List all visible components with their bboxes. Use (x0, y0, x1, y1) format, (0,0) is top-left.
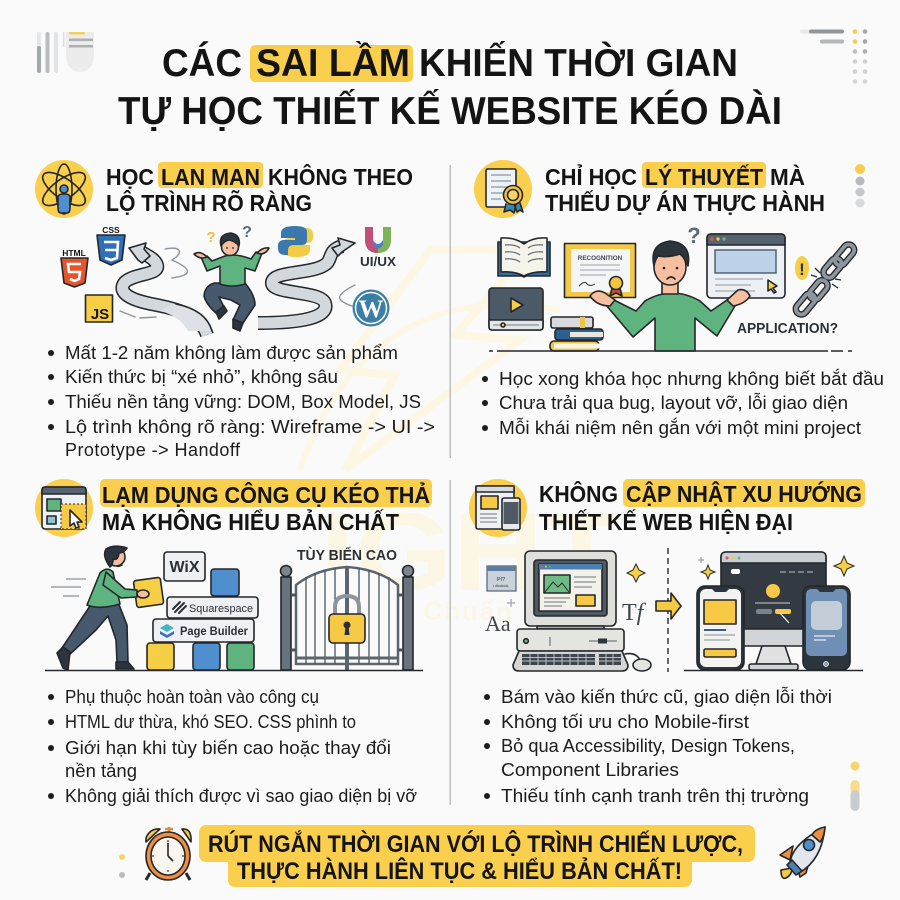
heading: THIẾT KẾ WEB HIỆN ĐẠI (539, 508, 793, 535)
illustration: builder tools versus locked gate (45, 546, 423, 670)
watermark (300, 250, 620, 626)
heading: LAN MAN (161, 164, 260, 190)
arrow: old to new (656, 593, 681, 619)
icon: atom person (35, 160, 93, 218)
label: serif Tf: Tf (622, 600, 647, 626)
arrow: left winding road (122, 243, 212, 335)
decoration: lower right dots (850, 762, 860, 811)
tool block: page builder: Page Builder (180, 626, 248, 638)
label: serif Aa: Aa (485, 611, 511, 636)
icon: locked gate (280, 566, 414, 670)
icon: css3 (97, 225, 125, 265)
icon: warning mark: ! (799, 260, 805, 279)
panel: lạm dụng công cụ kéo thả (35, 479, 432, 806)
icon: drag and drop window (35, 479, 93, 537)
icon: broken chain (794, 242, 856, 317)
callout text (199, 825, 755, 887)
bullet list (482, 368, 884, 438)
person: holding certificate and browser: ? (687, 223, 701, 248)
icon: open book (498, 238, 550, 277)
icon: wordpress: W (358, 296, 384, 323)
icon: ui/ux: UI/UX (360, 254, 396, 269)
bullet list: Lộ trình không rõ ràng: Wireframe -> UI -> (65, 417, 435, 437)
icon: javascript: JS (91, 306, 109, 323)
icon: retro computer (513, 551, 651, 671)
tool block: wix: WiX (169, 559, 200, 576)
bullet list: Prototype -> Handoff (65, 440, 241, 460)
tool block: wix (164, 552, 205, 581)
bullet list: Bám vào kiến thức cũ, giao diện lỗi thời (501, 686, 832, 707)
icon: html5: HTML (62, 248, 86, 258)
callout text: THỰC HÀNH LIÊN TỤC & HIỂU BẢN CHẤT! (237, 856, 682, 885)
icon: browser window (707, 234, 785, 298)
bullet list: HTML dư thừa, khó SEO. CSS phình to (65, 712, 356, 732)
bullet list: Không giải thích được vì sao giao diện bị vỡ (65, 786, 417, 806)
heading: CẬP NHẬT XU HƯỚNG (626, 480, 862, 507)
bullet list: nền tảng (65, 761, 137, 781)
arrow: right winding road (258, 238, 355, 323)
footer callout (146, 825, 825, 887)
heading: KHÔNG THEO (268, 163, 413, 190)
illustration: old computer to modern devices (485, 548, 863, 672)
person: holding certificate and browser (590, 223, 750, 351)
bullet list: Thiếu tính cạnh tranh trên thị trường (501, 786, 809, 806)
icon: browser and phone (469, 479, 527, 537)
icon: alarm clock (146, 827, 191, 880)
icon: modern devices (697, 552, 850, 670)
bullet list (48, 343, 435, 460)
person: confused at crossroads (194, 224, 269, 331)
decoration: lower left dots (119, 854, 125, 878)
icon: video player (489, 288, 543, 330)
panel: không cập nhật xu hướng (469, 479, 865, 806)
illustration: tangled learning paths (61, 224, 396, 335)
divider: dashed (667, 548, 669, 672)
bullet list: Mỗi khái niệm nên gắn với một mini project (499, 417, 861, 438)
title: TỰ HỌC THIẾT KẾ WEBSITE KÉO DÀI (118, 89, 782, 133)
panel: học lan man (35, 160, 435, 460)
bullet list: Học xong khóa học nhưng không biết bắt đầu (499, 368, 884, 389)
heading: CHỈ HỌC (545, 162, 637, 190)
tool block: page builder (153, 619, 254, 642)
icon: python (278, 226, 313, 257)
bullet list: Mất 1-2 năm không làm được sản phẩm (65, 343, 398, 363)
icon: rocket (780, 827, 825, 878)
bullet list (484, 686, 832, 806)
bullet list: Không tối ưu cho Mobile-first (501, 712, 749, 732)
heading (100, 479, 432, 535)
heading: LỘ TRÌNH RÕ RÀNG (106, 189, 312, 216)
heading (545, 162, 825, 216)
label: application: APPLICATION? (737, 321, 838, 337)
decoration: top left bars (37, 32, 94, 73)
person: confused at crossroads: ? (242, 224, 252, 241)
icon: css3: CSS (102, 225, 120, 235)
icon: old window: PI? (497, 577, 505, 583)
title: CÁC (162, 41, 242, 85)
person: confused at crossroads: ? (206, 229, 216, 246)
icon: wordpress (352, 290, 390, 326)
person: pushing block (57, 546, 164, 670)
icon: recognition certificate: RECOGNITION (578, 255, 623, 262)
bullet list: Thiếu nền tảng vững: DOM, Box Model, JS (65, 392, 421, 412)
scribble lines (120, 248, 355, 318)
tool block: squarespace (167, 597, 258, 618)
callout text: RÚT NGẮN THỜI GIAN VỚI LỘ TRÌNH CHIẾN LƯỢC, (208, 830, 743, 858)
block: blue top (211, 569, 239, 596)
icon: old window (487, 566, 516, 591)
icon: ui/ux (360, 227, 396, 269)
bullet list: Component Libraries (501, 760, 679, 780)
watermark: Nhanh - Chuẩn - Đẹp (305, 596, 595, 626)
decoration: right dots (855, 164, 865, 208)
illustration: theory without application (489, 223, 856, 351)
heading (106, 162, 413, 216)
icon: old window: • dlodooA, (493, 584, 509, 588)
icon: certificate (474, 160, 532, 218)
title: SAI LẦM (256, 41, 410, 85)
heading: HỌC (106, 164, 154, 190)
icon: stacked books (550, 317, 603, 351)
bullet list: Bỏ qua Accessibility, Design Tokens, (501, 736, 795, 756)
heading (539, 479, 865, 535)
heading: THIẾU DỰ ÁN THỰC HÀNH (545, 189, 825, 216)
dividers (450, 165, 451, 805)
heading: MÀ KHÔNG HIỂU BẢN CHẤT (102, 507, 400, 535)
tool block: squarespace: Squarespace (189, 603, 253, 615)
title (118, 41, 782, 133)
title: KHIẾN THỜI GIAN (419, 41, 738, 85)
bullet list: Kiến thức bị “xé nhỏ”, không sâu (65, 367, 338, 387)
bullet list (48, 687, 417, 806)
motion lines (51, 579, 86, 596)
blocks: foundation row (147, 643, 254, 670)
heading: MÀ (770, 163, 805, 190)
heading: LẠM DỤNG CÔNG CỤ KÉO THẢ (102, 480, 430, 508)
bullet list: Chưa trải qua bug, layout vỡ, lỗi giao diện (499, 392, 848, 413)
label: tùy biến cao: TÙY BIẾN CAO (297, 546, 397, 564)
decoration: top right lines and dots (800, 29, 867, 84)
icon: warning mark (795, 256, 809, 280)
watermark: IGHT (320, 491, 620, 614)
bullet list: Phụ thuộc hoàn toàn vào công cụ (65, 687, 319, 707)
icon: html5 (61, 248, 88, 287)
panel: chỉ học lý thuyết (474, 160, 884, 438)
heading: LÝ THUYẾT (645, 163, 764, 190)
sparkles (507, 556, 854, 607)
icon: recognition certificate (564, 244, 636, 298)
bullet list: Giới hạn khi tùy biến cao hoặc thay đổi (65, 738, 391, 758)
heading: KHÔNG (539, 480, 618, 507)
icon: javascript (86, 295, 112, 323)
